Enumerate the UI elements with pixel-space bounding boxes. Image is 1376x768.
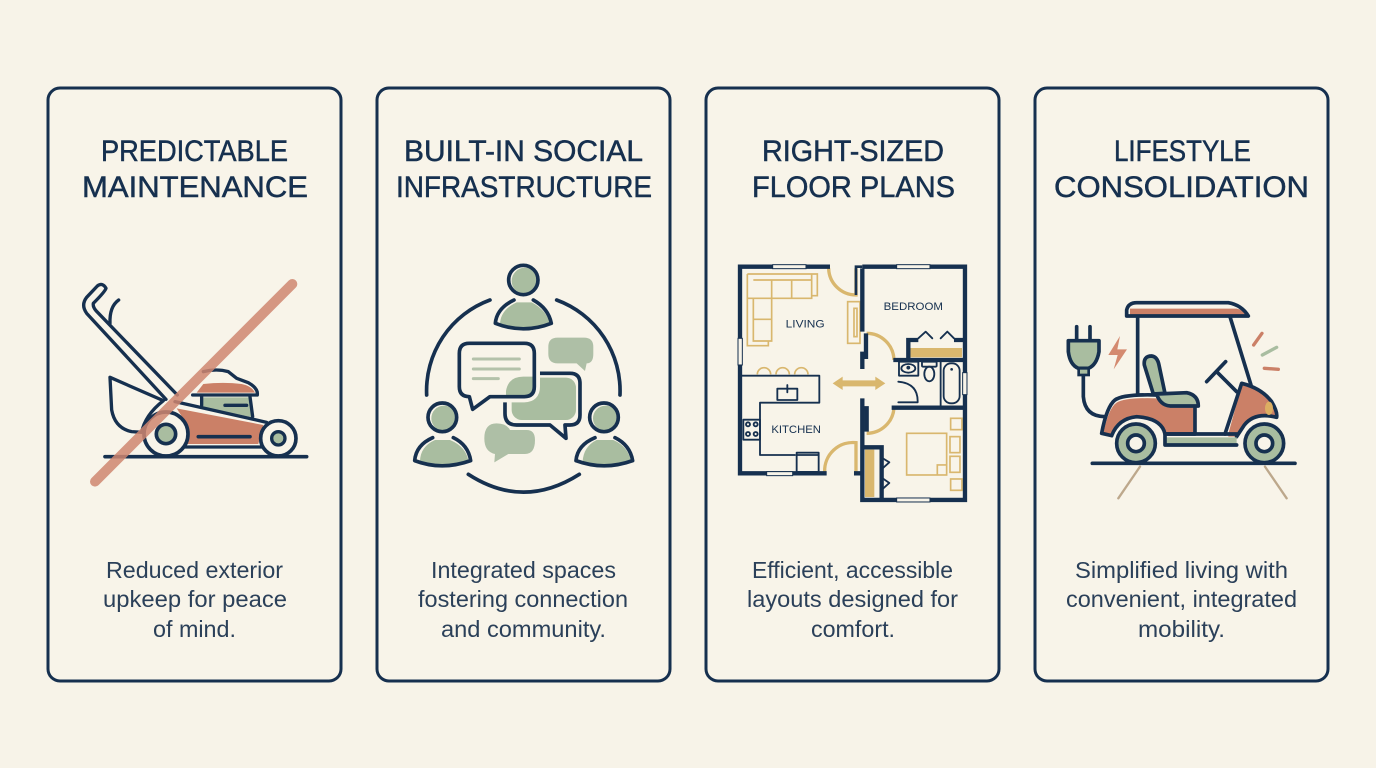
- icon: electric golf cart with plug: [1068, 303, 1295, 498]
- panel: right-sized floor plans: [706, 88, 999, 681]
- speech bubble: light bottom: [484, 423, 535, 462]
- arrow: between rooms: [833, 377, 885, 390]
- panel: built-in social infrastructure: [377, 88, 670, 681]
- room labels: LIVING: [786, 318, 825, 330]
- walls: [740, 267, 965, 500]
- speech bubble: light top right: [548, 338, 593, 371]
- gold furniture: [747, 274, 962, 490]
- description: predictable maintenance: [103, 557, 287, 642]
- gold doors: [825, 268, 894, 472]
- heading: built-in social infrastructure: INFRASTRUCTURE: [396, 171, 652, 204]
- icon: apartment floor plan: [738, 265, 967, 502]
- panel: lifestyle consolidation: [1035, 88, 1328, 681]
- description: right-sized floor plans: comfort.: [811, 616, 895, 642]
- room labels: KITCHEN: [771, 424, 821, 436]
- room labels: BEDROOM: [884, 301, 943, 313]
- heading: lifestyle consolidation: CONSOLIDATION: [1054, 171, 1309, 204]
- heading: right-sized floor plans: RIGHT-SIZED: [762, 135, 944, 168]
- description: lifestyle consolidation: convenient, integrated: [1066, 586, 1297, 612]
- ground and stand lines: [1118, 467, 1287, 498]
- speech bubble: outlined with text lines: [459, 343, 534, 409]
- steering wheel: [1207, 362, 1237, 392]
- windows: [738, 265, 967, 502]
- description: lifestyle consolidation: Simplified living with: [1075, 557, 1288, 583]
- heading: lifestyle consolidation: [1054, 135, 1309, 204]
- heading: lifestyle consolidation: LIFESTYLE: [1114, 135, 1251, 168]
- person: right: [576, 403, 633, 466]
- description: predictable maintenance: of mind.: [153, 616, 236, 642]
- description: built-in social infrastructure: and community.: [441, 616, 606, 642]
- person: top: [495, 265, 551, 329]
- description: predictable maintenance: Reduced exterior: [106, 557, 283, 583]
- heading: predictable maintenance: PREDICTABLE: [101, 135, 288, 168]
- icon: crossed-out lawn mower: [84, 284, 307, 482]
- person: left: [415, 403, 471, 466]
- description: built-in social infrastructure: [418, 557, 628, 642]
- icon: community circle with speech bubbles: [415, 265, 633, 492]
- description: built-in social infrastructure: fostering connection: [418, 586, 628, 612]
- plug and cord: [1068, 327, 1105, 417]
- heading: built-in social infrastructure: [396, 135, 652, 204]
- wheels: [1117, 424, 1284, 463]
- description: built-in social infrastructure: Integrated spaces: [431, 557, 616, 583]
- description: right-sized floor plans: layouts designed for: [747, 586, 958, 612]
- cart body: [1102, 383, 1277, 445]
- heading: predictable maintenance: MAINTENANCE: [82, 171, 308, 204]
- heading: right-sized floor plans: FLOOR PLANS: [752, 171, 955, 204]
- lightning bolt: [1108, 336, 1127, 369]
- panel: predictable maintenance: [48, 88, 341, 681]
- heading: right-sized floor plans: [752, 135, 955, 204]
- description: predictable maintenance: upkeep for peace: [103, 586, 287, 612]
- description: lifestyle consolidation: mobility.: [1138, 616, 1225, 642]
- heading: predictable maintenance: [82, 135, 308, 204]
- motion sparks: [1254, 333, 1278, 369]
- heading: built-in social infrastructure: BUILT-IN SOCIAL: [404, 135, 643, 168]
- description: right-sized floor plans: Efficient, accessible: [752, 557, 953, 583]
- room labels: [771, 301, 943, 436]
- interior thin lines and fixtures: [742, 332, 960, 489]
- seat: [1144, 356, 1198, 406]
- roof: [1127, 303, 1248, 316]
- description: right-sized floor plans: [747, 557, 958, 642]
- speech bubble: filled green: [505, 373, 580, 438]
- description: lifestyle consolidation: [1066, 557, 1297, 642]
